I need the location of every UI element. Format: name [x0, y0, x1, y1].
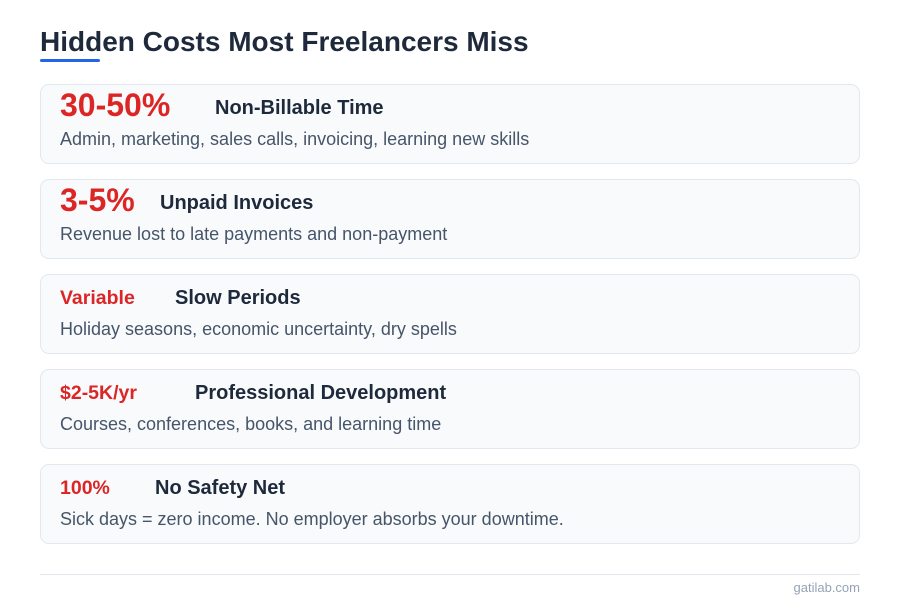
title underline [40, 59, 100, 62]
card: slow periods: Variable [60, 287, 135, 309]
card: professional development [40, 369, 860, 449]
card: unpaid invoices: 3-5% [60, 182, 135, 218]
title: Hidden Costs Most Freelancers Miss [40, 26, 529, 57]
card: no safety net: Sick days = zero income. No employer absorbs your downtime. [60, 509, 564, 529]
card: unpaid invoices: Revenue lost to late payments and non-payment [60, 224, 447, 244]
card: no safety net [40, 464, 860, 544]
card: no safety net: No Safety Net [155, 477, 285, 499]
card: non-billable time [40, 84, 860, 164]
card: slow periods: Holiday seasons, economic uncertainty, dry spells [60, 319, 457, 339]
card: unpaid invoices: Unpaid Invoices [160, 192, 313, 214]
card: non-billable time: Non-Billable Time [215, 97, 384, 119]
card: non-billable time: 30-50% [60, 87, 170, 123]
card: slow periods: Slow Periods [175, 287, 301, 309]
footer source: gatilab.com [794, 580, 860, 595]
card: professional development: Professional Development [195, 382, 446, 404]
card: unpaid invoices [40, 179, 860, 259]
card: professional development: $2-5K/yr [60, 382, 137, 404]
card: professional development: Courses, conferences, books, and learning time [60, 414, 441, 434]
card: non-billable time: Admin, marketing, sales calls, invoicing, learning new skills [60, 129, 529, 149]
card: slow periods [40, 274, 860, 354]
card: no safety net: 100% [60, 477, 110, 499]
